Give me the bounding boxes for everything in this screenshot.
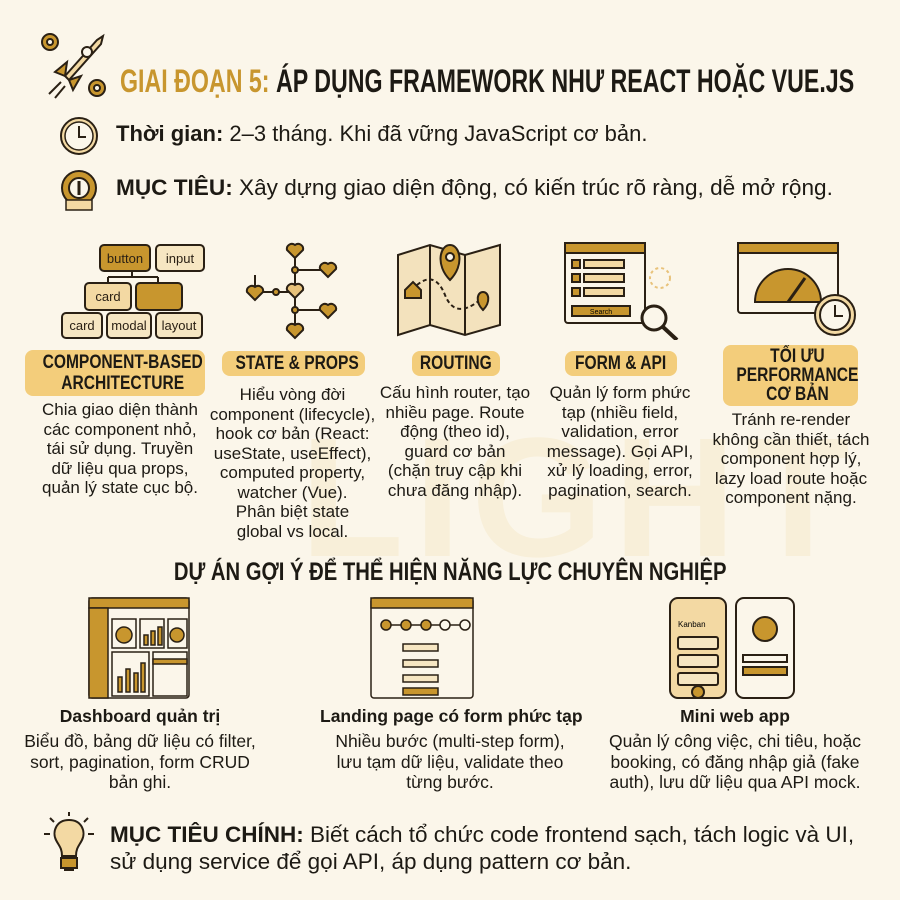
description: (chặn truy cập khi	[388, 461, 522, 480]
illustration: multi-step form	[370, 597, 474, 699]
project description	[335, 731, 565, 792]
description: tái sử dụng. Truyền	[47, 439, 193, 458]
description: Tránh re-render	[732, 410, 850, 429]
description	[547, 383, 693, 500]
icon: component blocks: layout	[162, 318, 197, 333]
icon: gauge with clock	[737, 242, 856, 336]
icon: clock	[60, 117, 98, 155]
icon: map	[397, 244, 501, 336]
description: chưa đăng nhập).	[388, 480, 522, 500]
project title: Mini web app	[680, 706, 790, 726]
label: CƠ BẢN	[766, 384, 829, 405]
label	[565, 351, 677, 376]
project description: Quản lý công việc, chi tiêu, hoặc	[609, 731, 861, 751]
description: message). Gọi API,	[547, 442, 693, 460]
description: không cần thiết, tách	[713, 430, 869, 448]
label	[25, 350, 205, 396]
description: component (lifecycle),	[210, 404, 375, 424]
watermark: LIGHT	[300, 403, 860, 593]
goal text: MỤC TIÊU: Xây dựng giao diện động, có kiến trúc rõ ràng, dễ mở rộng.	[116, 175, 833, 200]
icon: component blocks: modal	[111, 318, 147, 333]
main goal text: MỤC TIÊU CHÍNH: Biết cách tổ chức code frontend sạch, tách logic và UI,	[110, 822, 854, 847]
project description: bản ghi.	[109, 772, 171, 792]
description: validation, error	[561, 422, 679, 441]
description: component hợp lý,	[721, 449, 861, 468]
label: FORM & API	[575, 353, 667, 374]
description: động (theo id),	[400, 422, 510, 441]
label: TỐI ƯU	[770, 346, 825, 367]
description	[42, 400, 198, 497]
panel: routing	[380, 244, 530, 500]
description: guard cơ bản	[405, 442, 505, 460]
label: ROUTING	[420, 353, 492, 374]
icon: heart tree	[246, 242, 338, 340]
main goal text	[110, 822, 854, 874]
description: computed property,	[220, 463, 365, 482]
icon: rocket with gears	[41, 33, 106, 99]
description: Quản lý form phức	[550, 383, 690, 402]
project description	[609, 731, 861, 792]
main goal text: sử dụng service để gọi API, áp dụng pattern cơ bản.	[110, 849, 631, 874]
illustration: dashboard	[88, 597, 190, 699]
panel: state & props	[210, 242, 375, 540]
panel: component-based	[25, 244, 205, 497]
illustration: phones	[669, 597, 795, 699]
icon: light bulb	[44, 812, 94, 871]
project description: auth), lưu dữ liệu qua API mock.	[609, 772, 861, 792]
panel: form & api	[547, 242, 693, 500]
label: PERFORMANCE	[736, 365, 858, 386]
icon: component blocks: card	[95, 289, 121, 304]
description: pagination, search.	[548, 480, 692, 500]
description	[380, 383, 530, 500]
description	[713, 410, 869, 507]
description: Phân biệt state	[236, 502, 349, 521]
project title: Landing page có form phức tạp	[320, 706, 583, 726]
label: STATE & PROPS	[236, 353, 359, 374]
icon: component blocks: card	[69, 318, 95, 333]
description: hook cơ bản (React:	[216, 424, 369, 443]
icon: component blocks	[61, 244, 205, 339]
illustration: phones: Kanban	[678, 620, 706, 629]
description: Cấu hình router, tạo	[380, 383, 530, 402]
project: mini web app	[609, 597, 861, 792]
label	[412, 351, 500, 376]
project description	[24, 731, 256, 792]
project: landing page	[320, 597, 583, 792]
label	[723, 345, 858, 406]
project description: booking, có đăng nhập giả (fake	[610, 752, 860, 772]
project description: Nhiều bước (multi-step form),	[335, 731, 565, 751]
project description: lưu tạm dữ liệu, validate theo	[337, 752, 563, 772]
label: COMPONENT-BASED	[43, 352, 203, 373]
icon: component blocks: button	[107, 251, 143, 266]
icon: gear wrench	[61, 170, 97, 211]
project title: Dashboard quản trị	[60, 706, 220, 726]
description: quản lý state cục bộ.	[42, 478, 198, 497]
description: watcher (Vue).	[238, 482, 347, 502]
description: useState, useEffect),	[214, 444, 371, 462]
icon: form with search: Search	[590, 309, 612, 316]
project description: Biểu đồ, bảng dữ liệu có filter,	[24, 731, 256, 751]
description: lazy load route hoặc	[715, 468, 867, 488]
description: global vs local.	[237, 522, 348, 540]
project description: từng bước.	[406, 772, 494, 792]
title: GIAI ĐOẠN 5: ÁP DỤNG FRAMEWORK NHƯ REACT HOẶC VUE.JS	[120, 63, 854, 99]
description: các component nhỏ,	[43, 420, 197, 438]
label: ARCHITECTURE	[61, 373, 184, 394]
project description: sort, pagination, form CRUD	[30, 752, 250, 772]
icon: component blocks: input	[166, 251, 194, 266]
description: dữ liệu qua props,	[51, 458, 189, 478]
time text: Thời gian: 2–3 tháng. Khi đã vững JavaScript cơ bản.	[116, 121, 647, 146]
description: Hiểu vòng đời	[240, 385, 345, 404]
project: dashboard	[24, 597, 256, 792]
description: xử lý loading, error,	[547, 461, 693, 480]
description: component nặng.	[725, 488, 857, 507]
icon: form with search	[564, 242, 678, 340]
description	[210, 385, 375, 540]
section heading: DỰ ÁN GỢI Ý ĐỂ THỂ HIỆN NĂNG LỰC CHUYÊN NGHIỆP	[174, 558, 726, 586]
panel: performance	[713, 242, 869, 507]
description: nhiều page. Route	[386, 402, 524, 422]
description: tạp (nhiều field,	[562, 402, 678, 422]
description: Chia giao diện thành	[42, 400, 198, 419]
